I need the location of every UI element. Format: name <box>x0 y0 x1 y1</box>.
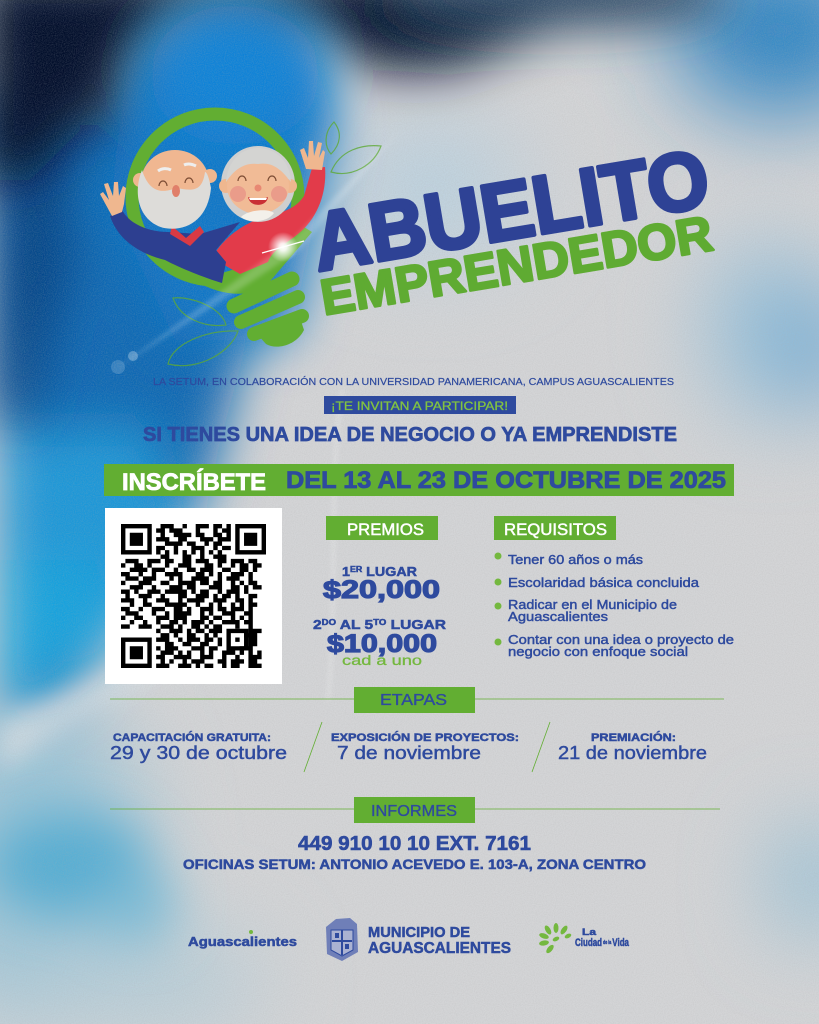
logo: Aguascalientes: Aguascalientes <box>188 934 297 949</box>
decorative leaves <box>168 122 381 366</box>
section: informes <box>110 797 720 872</box>
stage 3: PREMIACIÓN: <box>591 731 676 744</box>
first place: 1 <box>342 564 349 579</box>
section: informes: INFORMES <box>371 803 457 820</box>
first place <box>323 564 440 604</box>
second to fifth place: TO <box>373 618 386 627</box>
panel: requisitos <box>494 516 734 659</box>
second to fifth place: cad a uno <box>342 652 422 668</box>
grandmother <box>212 141 325 274</box>
panel: requisitos: REQUISITOS <box>504 520 607 539</box>
invitation banner: ¡TE INVITAN A PARTICIPAR! <box>331 399 508 413</box>
second to fifth place: LUGAR <box>386 617 447 632</box>
logo: Municipio de Aguascalientes: MUNICIPIO DE <box>368 924 470 941</box>
second to fifth place: 2 <box>313 617 320 632</box>
wordmark: ABUELITO <box>306 133 715 289</box>
requirement list <box>494 552 734 659</box>
first place: LUGAR <box>362 564 418 579</box>
icon: coat of arms <box>326 918 358 961</box>
second to fifth place: AL 5 <box>336 617 373 632</box>
stage 2: 7 de noviembre <box>337 743 481 763</box>
panel: premios <box>313 516 447 668</box>
section: etapas: ETAPAS <box>380 692 447 709</box>
stage 3 <box>558 731 707 763</box>
light bulb <box>132 114 312 347</box>
requirement list: Tener 60 años o más <box>508 552 644 567</box>
requirement list: Contar con una idea o proyecto de <box>508 632 734 647</box>
panel: premios: PREMIOS <box>347 520 424 539</box>
stage 1 <box>110 731 287 763</box>
first place: $20,000 <box>323 576 440 604</box>
section: etapas <box>110 687 724 772</box>
grandfather <box>100 150 240 283</box>
invitation banner <box>324 396 516 414</box>
stage 2 <box>331 731 519 763</box>
logo: La Ciudad de la Vida: de la <box>602 940 612 946</box>
stage 1: CAPACITACIÓN GRATUITA: <box>113 731 271 744</box>
logo: La Ciudad de la Vida <box>538 923 630 954</box>
stage 2: EXPOSICIÓN DE PROYECTOS: <box>331 731 519 744</box>
QR code <box>105 508 282 684</box>
second to fifth place <box>313 617 447 668</box>
registration banner: DEL 13 AL 23 DE OCTUBRE DE 2025 <box>286 467 726 494</box>
grandparents illustration <box>100 141 325 283</box>
lens flare <box>111 130 400 374</box>
logo: La Ciudad de la Vida: Vida <box>612 937 630 949</box>
logo: Municipio de Aguascalientes <box>326 918 511 961</box>
logo: La Ciudad de la Vida: La <box>582 927 597 937</box>
registration banner <box>104 464 734 496</box>
icon: leaves <box>538 923 572 954</box>
requirement list: Aguascalientes <box>508 609 609 624</box>
phone: 449 910 10 10 EXT. 7161 <box>298 833 531 855</box>
logo: Abuelito Emprendedor <box>100 114 716 374</box>
stage 1: 29 y 30 de octubre <box>110 743 287 763</box>
logo: La Ciudad de la Vida: Ciudad <box>575 937 612 949</box>
requirement list: Escolaridad básica concluida <box>508 575 700 590</box>
second to fifth place: $10,000 <box>327 630 437 658</box>
second to fifth place: DO <box>322 618 336 627</box>
registration banner: INSCRÍBETE <box>122 468 266 496</box>
wordmark: EMPRENDEDOR <box>317 205 716 326</box>
requirement list: negocio con enfoque social <box>508 644 688 659</box>
logo: Municipio de Aguascalientes: AGUASCALIENTES <box>368 940 511 957</box>
subtitle: SI TIENES UNA IDEA DE NEGOCIO O YA EMPRENDISTE <box>143 424 677 446</box>
first place: ER <box>350 565 362 574</box>
logo: Aguascalientes <box>188 930 297 949</box>
requirement list: Radicar en el Municipio de <box>508 597 677 612</box>
address: OFICINAS SETUM: ANTONIO ACEVEDO E. 103-A, ZONA CENTRO <box>183 856 646 872</box>
intro line: LA SETUM, EN COLABORACIÓN CON LA UNIVERSIDAD PANAMERICANA, CAMPUS AGUASCALIENTES <box>153 375 674 388</box>
stage 3: 21 de noviembre <box>558 743 707 763</box>
